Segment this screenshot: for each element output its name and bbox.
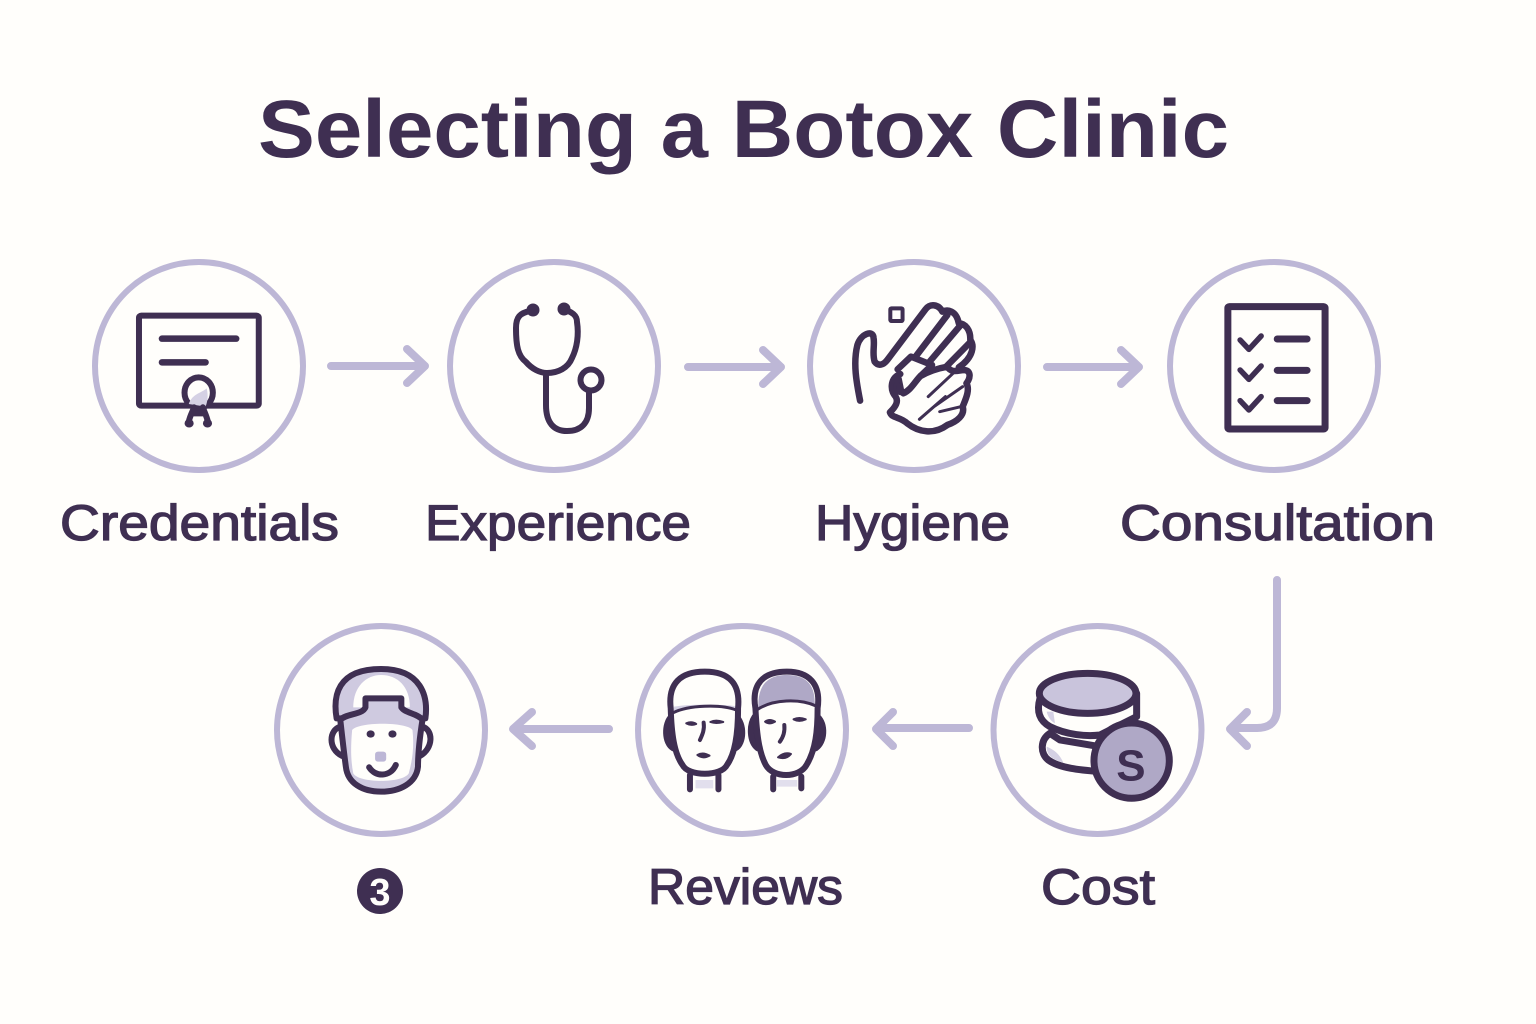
- step: Cost: [994, 626, 1202, 915]
- label: Hygiene: Hygiene: [815, 495, 1010, 551]
- circle: consultation: [1170, 262, 1378, 470]
- badge: number 3: [357, 868, 403, 914]
- circle: credentials: [95, 262, 303, 470]
- arrow: reviews to final step: [513, 712, 609, 746]
- icon: coins: [1038, 673, 1169, 798]
- arrow: credentials to experience: [331, 349, 425, 383]
- icon: coins: S: [1116, 742, 1146, 791]
- icon: certificate: [139, 316, 259, 426]
- step: Reviews: [638, 626, 846, 915]
- icon: two faces: [666, 672, 823, 789]
- arrow: experience to hygiene: [688, 350, 781, 384]
- label: Credentials: Credentials: [60, 495, 339, 551]
- label: Cost: Cost: [1041, 859, 1155, 915]
- title: Selecting a Botox Clinic: [258, 84, 1229, 175]
- step: Experience: [425, 262, 691, 551]
- circle: reviews: [638, 626, 846, 834]
- step: Consultation: [1120, 262, 1435, 551]
- icon: stethoscope: [516, 304, 602, 431]
- circle: experience: [450, 262, 658, 470]
- circle: hygiene: [810, 262, 1018, 470]
- step: Credentials: [60, 262, 339, 551]
- badge: number 3: 3: [369, 872, 391, 914]
- label: Consultation: Consultation: [1120, 495, 1435, 551]
- circle: final step: [277, 626, 485, 834]
- arrow: hygiene to consultation: [1047, 350, 1139, 384]
- label: Reviews: Reviews: [648, 859, 843, 915]
- arrow: cost to reviews: [876, 712, 969, 746]
- label: Experience: Experience: [425, 495, 691, 551]
- step: Hygiene: [810, 262, 1018, 551]
- step: number three: [277, 626, 485, 914]
- icon: smiling face: [332, 669, 430, 792]
- icon: hands: [855, 305, 972, 431]
- circle: cost: [994, 626, 1202, 834]
- arrow: consultation down to cost: [1230, 580, 1277, 746]
- icon: checklist: [1228, 307, 1325, 429]
